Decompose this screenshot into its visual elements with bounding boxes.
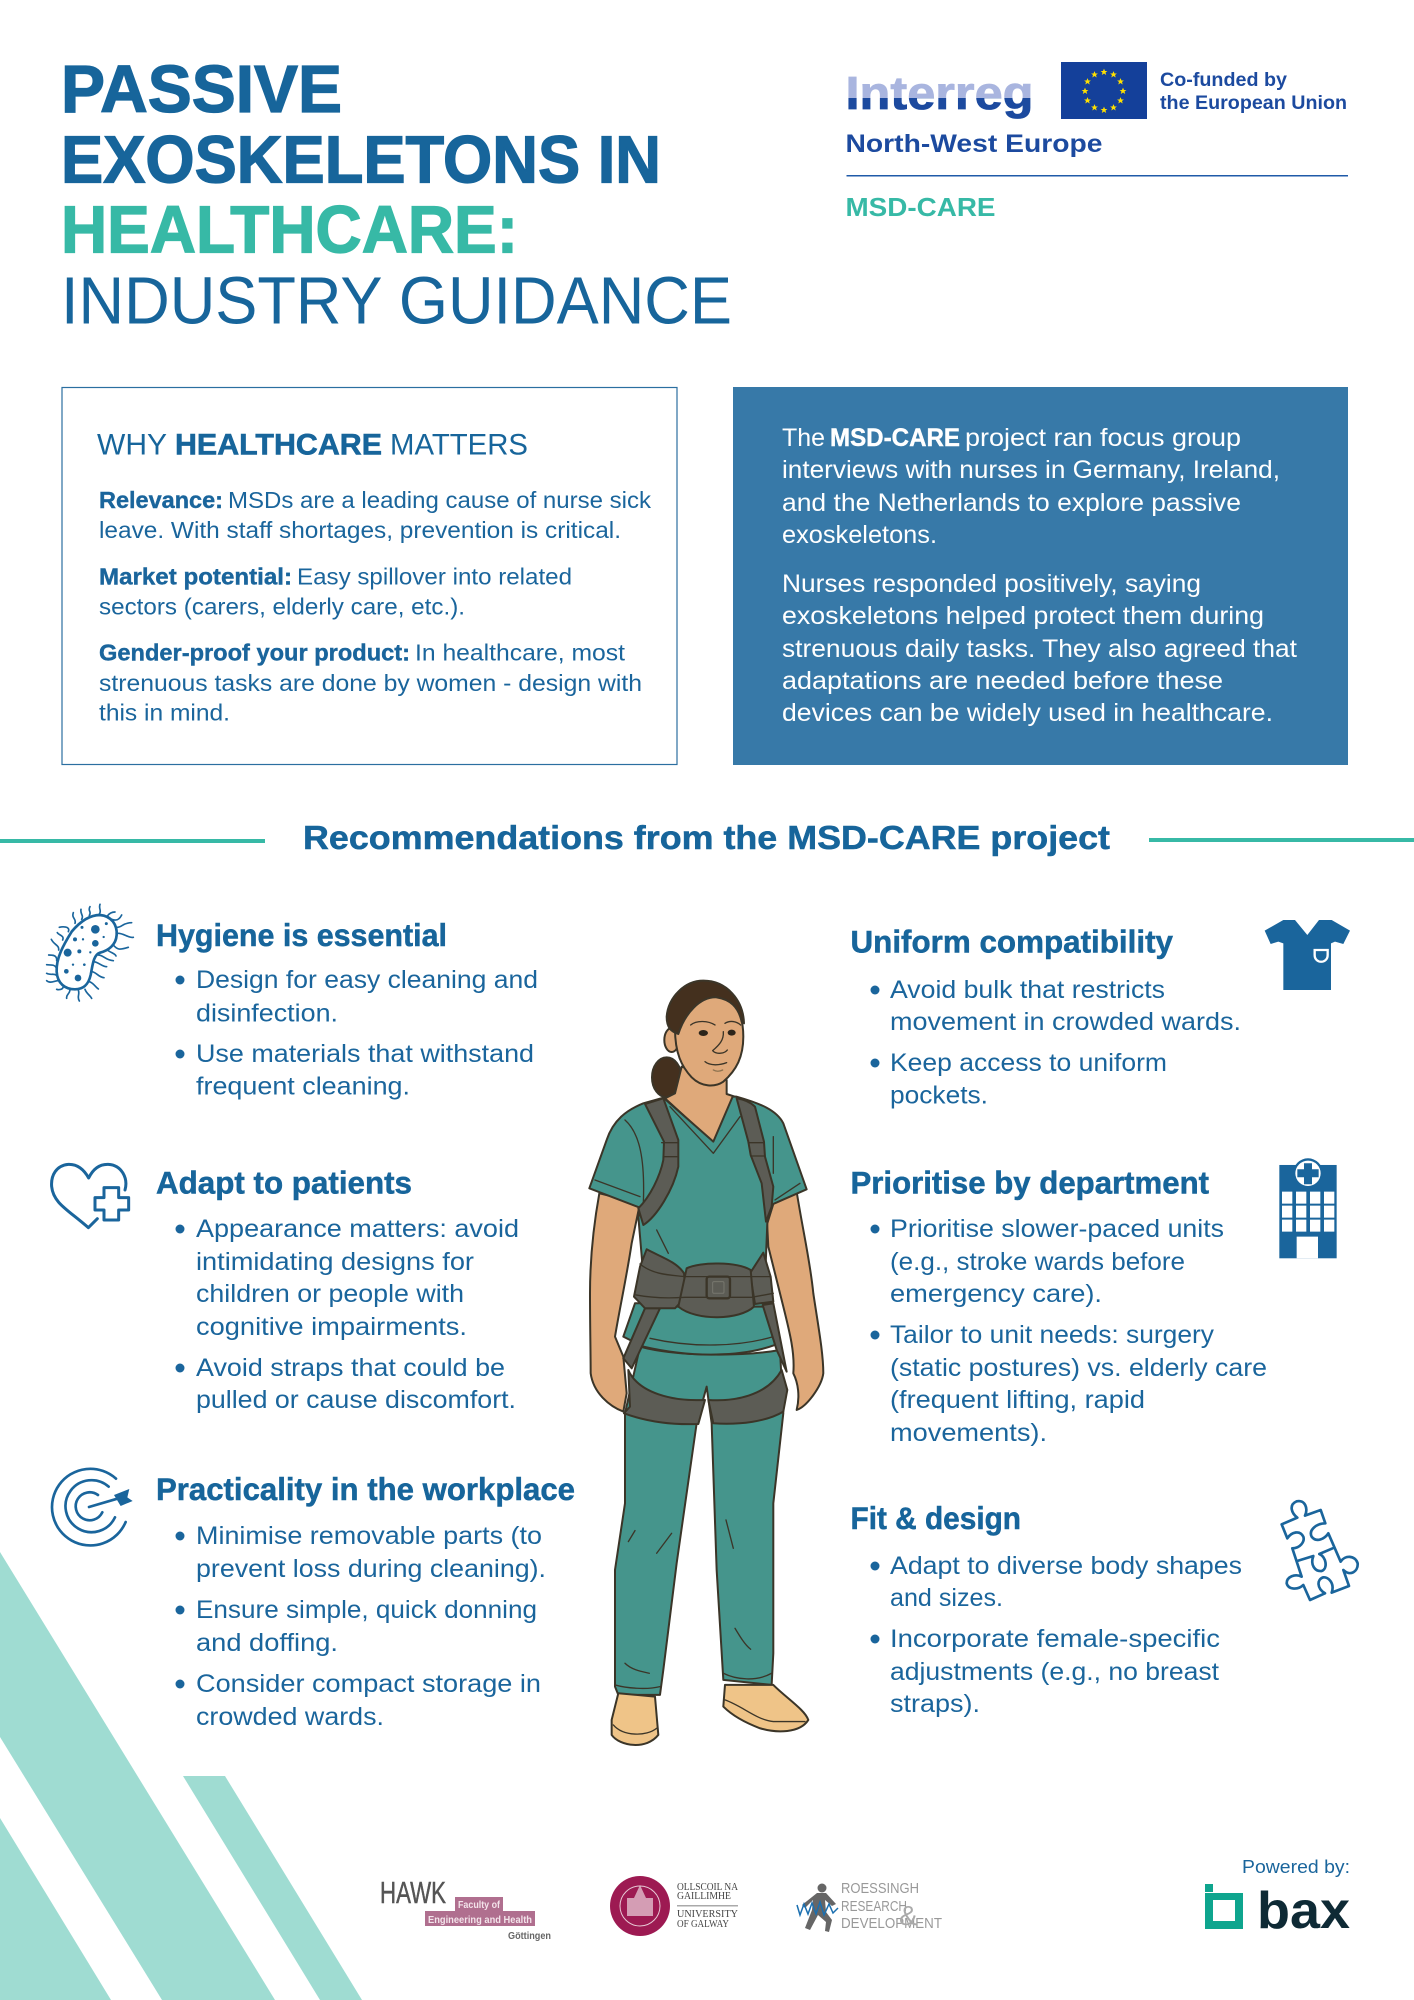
relevance text: MSDs are a leading cause of nurse sick: [228, 487, 651, 513]
panel heading: [97, 428, 528, 461]
icon: heart with cross: [52, 1164, 129, 1228]
nurses response paragraph: devices can be widely used in healthcare.: [782, 699, 1273, 727]
section heading: recommendations: Recommendations from the MSD-CARE project: [303, 820, 1110, 857]
recommendation: uniform compatibility: Avoid bulk that restricts: [890, 976, 1165, 1004]
shoes: [612, 1693, 658, 1745]
logo: Roessingh Research and Development: ROESSINGH: [841, 1881, 919, 1897]
panel heading: WHY: [97, 428, 167, 461]
logo: powered by bax: [1205, 1857, 1350, 1940]
lower tunic: [623, 1303, 775, 1355]
recommendation: adapt to patients: cognitive impairments.: [196, 1313, 467, 1341]
recommendation: practicality: and doffing.: [196, 1629, 338, 1657]
gender-proof text: In healthcare, most: [415, 640, 625, 666]
relevance text: [99, 487, 651, 543]
recommendation: prioritise by department: Prioritise slower-paced units: [890, 1215, 1224, 1243]
recommendation: uniform compatibility: Uniform compatibility: [850, 924, 1173, 960]
icon: uniform top: [1265, 920, 1350, 990]
panel: project summary: [733, 387, 1348, 765]
title: HEALTHCARE:: [61, 194, 518, 268]
recommendation: practicality: prevent loss during cleaning).: [196, 1555, 546, 1583]
decorative diagonal bands: [0, 1552, 362, 2000]
focus group paragraph: exoskeletons.: [782, 521, 937, 549]
recommendation: hygiene: Design for easy cleaning and: [196, 966, 538, 994]
logo: University of Galway: GAILLIMHE: [677, 1890, 731, 1902]
market potential text: [99, 564, 572, 620]
recommendation: adapt to patients: children or people with: [196, 1280, 464, 1308]
logo: University of Galway: UNIVERSITY: [677, 1908, 738, 1920]
illustration: nurse wearing passive exoskeleton: [589, 981, 823, 1745]
title: INDUSTRY GUIDANCE: [61, 264, 732, 338]
nurses response paragraph: [782, 570, 1297, 727]
nurses response paragraph: Nurses responded positively, saying: [782, 570, 1201, 598]
leg straps: [623, 1308, 660, 1368]
head: [675, 996, 743, 1085]
recommendation: prioritise by department: emergency care).: [890, 1280, 1102, 1308]
recommendation: practicality: Consider compact storage in: [196, 1670, 541, 1698]
recommendation: fit and design: Adapt to diverse body shapes: [890, 1552, 1242, 1580]
logo: powered by bax: Powered by:: [1242, 1857, 1350, 1877]
recommendation: fit and design: Fit & design: [850, 1500, 1021, 1536]
focus group paragraph: MSD-CARE: [830, 424, 960, 452]
logo: Roessingh Research and Development: &: [899, 1900, 918, 1931]
logo: powered by bax: bax: [1257, 1882, 1350, 1940]
recommendation: fit and design: and sizes.: [890, 1584, 1003, 1612]
logo: HAWK: Göttingen: [508, 1931, 551, 1942]
logo block: Interreg and EU co-funding: North-West Europe: [846, 130, 1103, 158]
title: [61, 53, 732, 338]
left shoulder strap: [638, 1098, 678, 1225]
panel heading: MATTERS: [390, 428, 528, 461]
trousers: [615, 1347, 783, 1695]
recommendation: uniform compatibility: pockets.: [890, 1082, 988, 1110]
logo: HAWK: HAWK: [380, 1875, 446, 1910]
tunic: [589, 1097, 807, 1307]
focus group paragraph: The: [782, 424, 825, 452]
logo: HAWK: [380, 1875, 551, 1942]
icon: bacterium: [47, 904, 133, 1001]
left arm: [590, 1193, 640, 1412]
recommendation: practicality: Minimise removable parts (to: [196, 1522, 542, 1550]
recommendation: practicality: Practicality in the workplace: [156, 1471, 575, 1507]
nurses response paragraph: strenuous daily tasks. They also agreed that: [782, 635, 1297, 663]
face details: [691, 1021, 741, 1071]
recommendation: fit and design: Incorporate female-specific: [890, 1625, 1220, 1653]
hip belt: [634, 1249, 773, 1317]
icon: puzzle pieces: [1282, 1501, 1358, 1600]
logo: Roessingh Research and Development: RESEARCH: [841, 1899, 907, 1915]
recommendation: adapt to patients: pulled or cause discomfort.: [196, 1386, 516, 1414]
recommendation: fit and design: adjustments (e.g., no breast: [890, 1658, 1219, 1686]
recommendation: fit and design: straps).: [890, 1690, 980, 1718]
focus group paragraph: and the Netherlands to explore passive: [782, 489, 1241, 517]
ear: [664, 1028, 679, 1052]
recommendation: practicality: crowded wards.: [196, 1703, 384, 1731]
recommendation: adapt to patients: Appearance matters: avoid: [196, 1215, 519, 1243]
recommendation: hygiene: [156, 917, 538, 1100]
logo: Roessingh Research and Development: DEVELOPMENT: [841, 1916, 942, 1932]
icon: target with dart: [52, 1469, 133, 1545]
logo: University of Galway: OF GALWAY: [677, 1918, 729, 1930]
gender-proof text: [99, 640, 642, 726]
thigh bands: [624, 1370, 705, 1424]
right shoulder strap: [737, 1098, 773, 1222]
recommendation: uniform compatibility: Keep access to uniform: [890, 1049, 1167, 1077]
recommendation: fit and design: [850, 1500, 1242, 1718]
recommendation: hygiene: Hygiene is essential: [156, 917, 447, 953]
recommendation: uniform compatibility: [850, 924, 1241, 1110]
neck: [665, 1067, 735, 1143]
nurses response paragraph: exoskeletons helped protect them during: [782, 602, 1264, 630]
recommendation: prioritise by department: (e.g., stroke wards before: [890, 1248, 1185, 1276]
gender-proof text: Gender-proof your product:: [99, 640, 410, 666]
recommendation: prioritise by department: (frequent lifting, rapid: [890, 1386, 1145, 1414]
logo: University of Galway: [610, 1876, 738, 1936]
trouser creases: [615, 1520, 772, 1688]
focus group paragraph: interviews with nurses in Germany, Ireland,: [782, 456, 1280, 484]
nurses response paragraph: adaptations are needed before these: [782, 667, 1223, 695]
recommendation: uniform compatibility: movement in crowded wards.: [890, 1008, 1241, 1036]
logo: University of Galway: OLLSCOIL NA: [677, 1881, 738, 1893]
panel heading: HEALTHCARE: [175, 428, 382, 461]
market potential text: Easy spillover into related: [297, 564, 572, 590]
relevance text: leave. With staff shortages, prevention is critical.: [99, 517, 621, 543]
recommendation: hygiene: disinfection.: [196, 1000, 338, 1028]
relevance text: Relevance:: [99, 487, 223, 513]
recommendation: prioritise by department: Prioritise by department: [850, 1164, 1210, 1200]
recommendation: hygiene: Use materials that withstand: [196, 1040, 534, 1068]
recommendation: prioritise by department: Tailor to unit needs: surgery: [890, 1321, 1215, 1349]
title: EXOSKELETONS IN: [61, 124, 661, 198]
logo: HAWK: Engineering and Health: [428, 1915, 532, 1926]
logo block: Interreg and EU co-funding: Co-funded by: [1160, 69, 1287, 91]
recommendation: adapt to patients: Avoid straps that could be: [196, 1354, 505, 1382]
logo block: Interreg and EU co-funding: Interreg: [846, 67, 1034, 119]
logo: Roessingh Research and Development: [797, 1881, 942, 1932]
recommendation: hygiene: frequent cleaning.: [196, 1072, 410, 1100]
focus group paragraph: project ran focus group: [965, 424, 1241, 452]
recommendation: prioritise by department: movements).: [890, 1419, 1047, 1447]
section heading: recommendations: [0, 820, 1414, 857]
title: PASSIVE: [61, 53, 342, 127]
recommendation: adapt to patients: [156, 1164, 519, 1414]
logo block: Interreg and EU co-funding: [846, 62, 1348, 222]
market potential text: Market potential:: [99, 564, 292, 590]
recommendation: adapt to patients: intimidating designs for: [196, 1248, 474, 1276]
logo block: Interreg and EU co-funding: the European Union: [1160, 92, 1347, 114]
hair: [667, 981, 744, 1034]
recommendation: practicality: [156, 1471, 575, 1731]
panel: why healthcare matters: [62, 388, 677, 764]
right arm: [766, 1192, 823, 1410]
gender-proof text: this in mind.: [99, 700, 230, 726]
logo: HAWK: Faculty of: [458, 1900, 501, 1911]
recommendation: adapt to patients: Adapt to patients: [156, 1164, 412, 1200]
logo block: Interreg and EU co-funding: MSD-CARE: [846, 192, 996, 222]
gender-proof text: strenuous tasks are done by women - design with: [99, 670, 642, 696]
icon: hospital: [1279, 1158, 1337, 1258]
recommendation: practicality: Ensure simple, quick donning: [196, 1596, 537, 1624]
focus group paragraph: [782, 424, 1280, 549]
hair bun: [652, 1057, 681, 1097]
recommendation: prioritise by department: (static postures) vs. elderly care: [890, 1354, 1267, 1382]
market potential text: sectors (carers, elderly care, etc.).: [99, 594, 465, 620]
recommendation: prioritise by department: [850, 1164, 1267, 1447]
